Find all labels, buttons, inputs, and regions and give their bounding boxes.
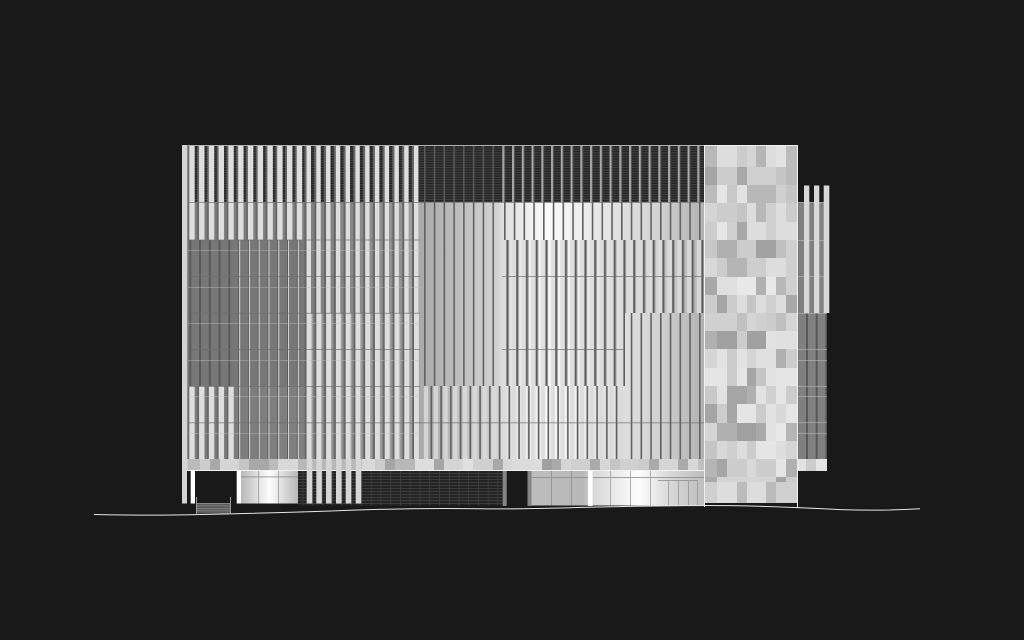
upper dark louvre band bbox=[182, 145, 704, 202]
ground floor bbox=[191, 459, 704, 514]
grey pier pair bbox=[503, 471, 532, 506]
mosaic band above ground floor bbox=[187, 459, 705, 471]
left edge column bbox=[182, 145, 188, 504]
entrance column right bbox=[237, 471, 241, 504]
wing floor lines bbox=[798, 202, 829, 434]
entrance column left bbox=[191, 471, 195, 504]
fins: right panels bbox=[424, 240, 704, 459]
fins: upper left bbox=[188, 202, 420, 313]
glazing right bbox=[532, 471, 704, 506]
glazing left bbox=[241, 471, 298, 504]
left dark panel block bbox=[188, 240, 310, 386]
mosaic tower bbox=[704, 145, 798, 508]
white pier bbox=[588, 471, 593, 506]
wing panel lines bbox=[798, 202, 827, 459]
plain panel lines bbox=[420, 202, 704, 459]
floor lines bbox=[182, 202, 704, 423]
dark louvre wall bbox=[298, 471, 503, 506]
ground line bbox=[94, 505, 920, 515]
wing fins bbox=[804, 186, 829, 313]
ground-floor fins bbox=[307, 459, 361, 504]
light mullion lines bbox=[188, 250, 420, 434]
fins: left panels bbox=[188, 240, 420, 459]
tower outline bbox=[704, 145, 798, 508]
wing base tiles bbox=[798, 459, 827, 471]
graded wall panels bbox=[188, 202, 704, 459]
main facade bbox=[182, 145, 704, 504]
tile rows bbox=[705, 146, 797, 503]
entrance stairs bbox=[196, 497, 231, 514]
right wing bbox=[798, 186, 829, 471]
